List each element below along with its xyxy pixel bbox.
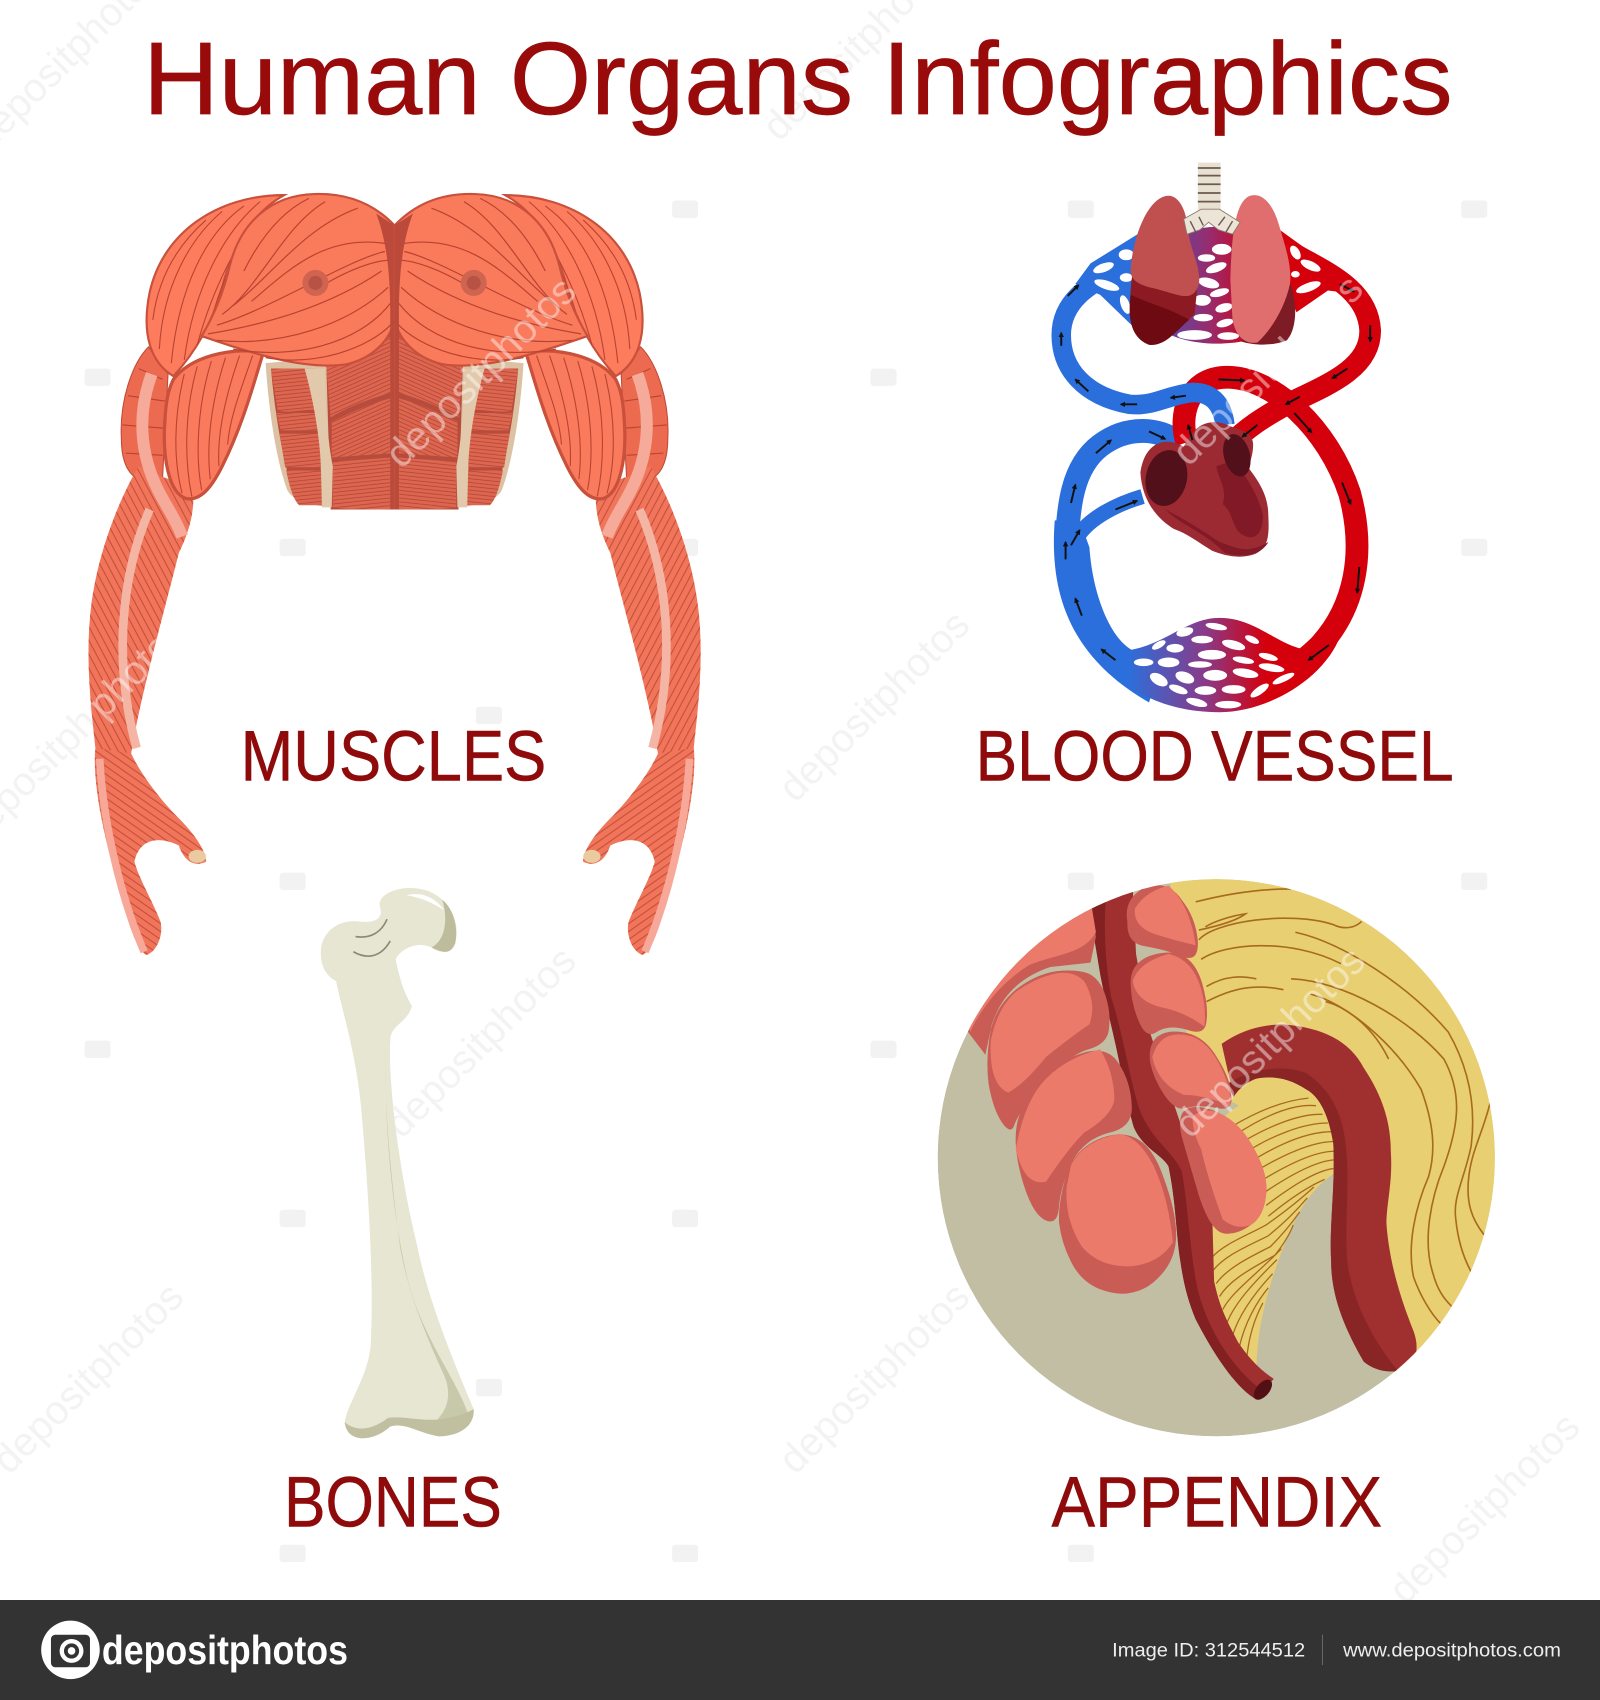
image id: Image ID: 312544512 bbox=[1112, 1639, 1305, 1661]
title: Human Organs Infographics bbox=[143, 21, 1453, 136]
biceps bbox=[164, 351, 263, 499]
mesentery lines bbox=[1212, 1098, 1334, 1359]
rete and lung capillaries bbox=[1092, 244, 1322, 340]
lower wide blue bbox=[1054, 520, 1165, 702]
triceps bbox=[121, 347, 168, 479]
ileum tube bbox=[1222, 1024, 1417, 1371]
muscles illustration bbox=[89, 194, 701, 955]
faint watermarks: depositphotos bbox=[770, 1275, 978, 1482]
label: bones: BONES bbox=[284, 1462, 502, 1542]
watermarks: depositphotos bbox=[377, 269, 585, 476]
upper red vessel bbox=[1230, 251, 1370, 444]
label: blood vessel: BLOOD VESSEL bbox=[976, 716, 1454, 796]
label: muscles: MUSCLES bbox=[241, 716, 546, 796]
faint camera marks bbox=[85, 201, 1487, 1562]
faint watermarks: depositphotos bbox=[377, 938, 585, 1146]
forearm and hand bbox=[89, 374, 206, 955]
left lung bbox=[1130, 196, 1199, 345]
deltoid bbox=[147, 195, 284, 376]
appendix illustration bbox=[938, 867, 1518, 1442]
nipple bbox=[302, 270, 328, 296]
faint watermarks: depositphotos bbox=[1381, 1405, 1588, 1612]
lung capillary bed bbox=[1162, 227, 1274, 344]
watermarks: photos bbox=[79, 610, 195, 726]
flow arrows bbox=[1061, 284, 1370, 660]
abdomen bbox=[266, 325, 395, 509]
lower blue vessel bbox=[1067, 431, 1177, 562]
logo text: depositphotos bbox=[102, 1627, 348, 1673]
fat lines bbox=[1196, 889, 1491, 1324]
watermarks bbox=[79, 266, 1374, 1146]
heart bbox=[1140, 422, 1269, 557]
fat tissue bbox=[1170, 879, 1495, 1368]
footer bar bbox=[0, 1600, 1600, 1700]
watermarks: depositphotos bbox=[1164, 266, 1372, 474]
left rete bbox=[1075, 230, 1149, 325]
right rete bbox=[1274, 225, 1364, 312]
circle background bbox=[938, 879, 1495, 1436]
pectoral bbox=[202, 194, 395, 366]
bottom capillary bed bbox=[1117, 618, 1342, 712]
right lung bbox=[1230, 195, 1295, 345]
lower red vessel bbox=[1184, 377, 1357, 678]
appendix stem bbox=[1089, 889, 1276, 1403]
sternum bbox=[376, 214, 395, 509]
upper blue vessel bbox=[1061, 271, 1225, 425]
faint watermarks: depositphotos bbox=[770, 602, 978, 810]
fat lobes bbox=[954, 885, 1266, 1294]
watermarks: depositphotos bbox=[1166, 938, 1374, 1146]
tendon strip bbox=[305, 369, 333, 507]
label: appendix: APPENDIX bbox=[1051, 1462, 1382, 1542]
logo icon bbox=[41, 1621, 100, 1679]
mesentery bbox=[1212, 1106, 1334, 1365]
trachea and bronchi bbox=[1184, 163, 1240, 234]
bone illustration bbox=[321, 888, 474, 1438]
blood vessel illustration bbox=[1054, 163, 1370, 712]
body capillaries bbox=[1134, 621, 1296, 709]
website: www.depositphotos.com bbox=[1342, 1639, 1561, 1661]
blue branch bbox=[1078, 496, 1143, 537]
